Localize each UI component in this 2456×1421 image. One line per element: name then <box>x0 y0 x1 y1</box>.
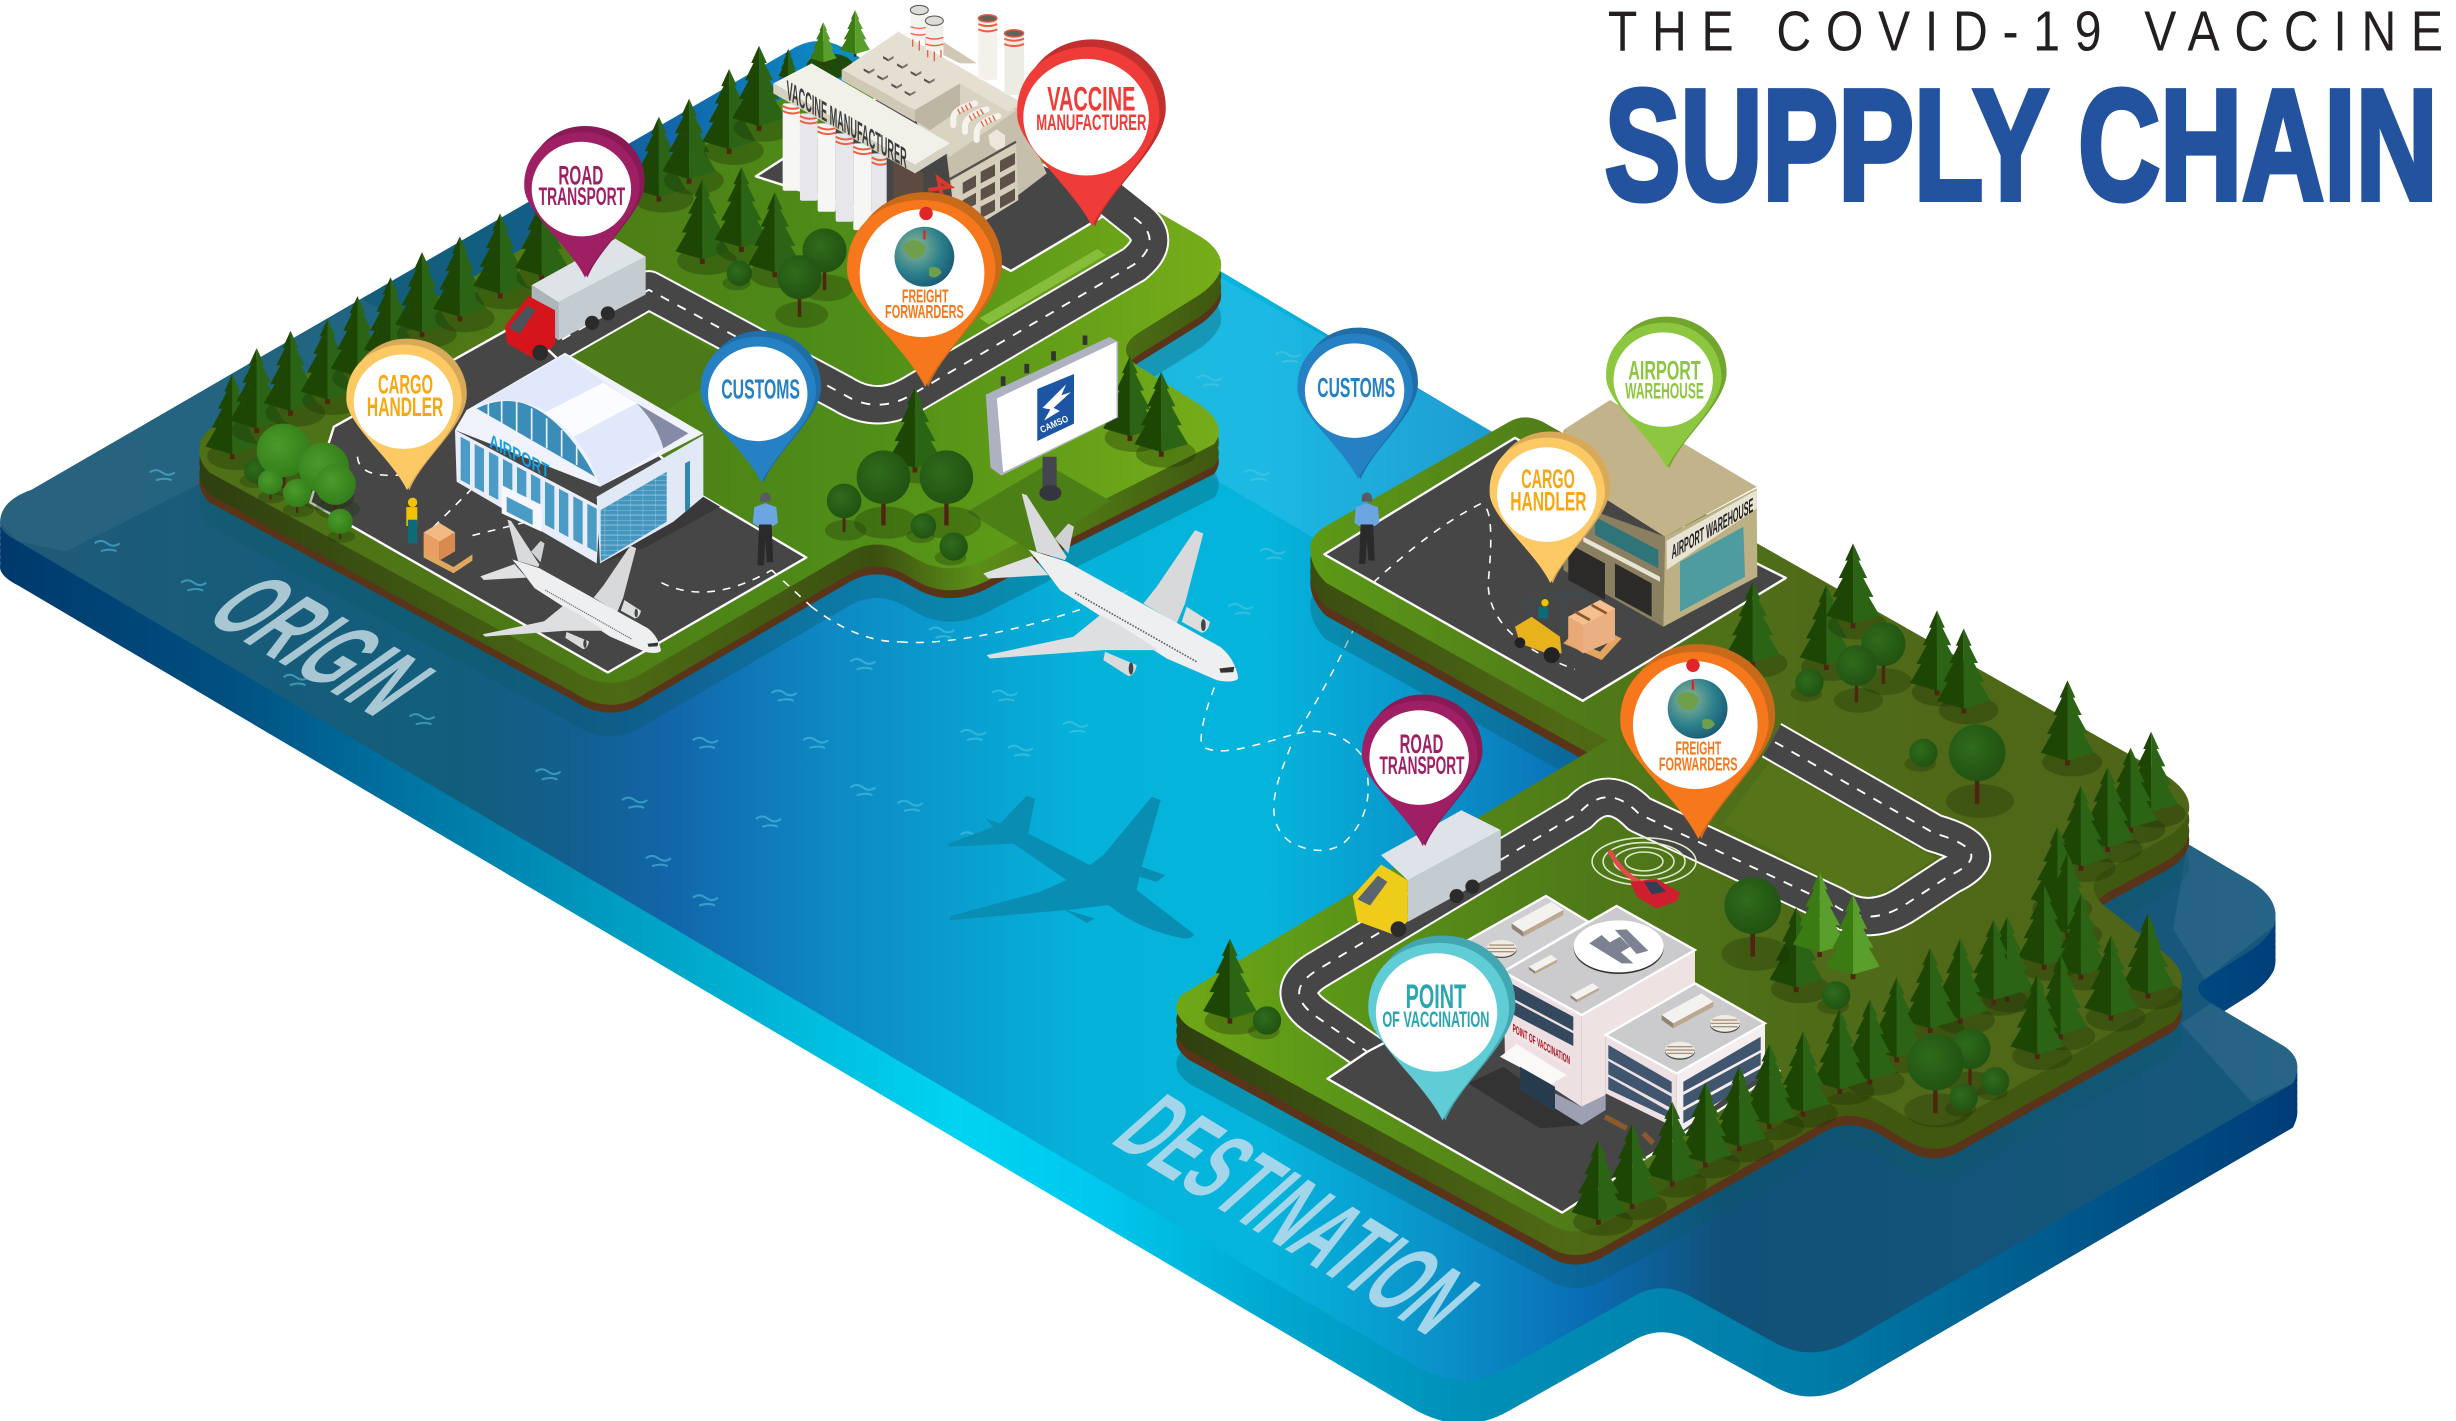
body <box>1630 879 1680 909</box>
right wing right wall <box>1677 1023 1765 1130</box>
window wing <box>952 143 1018 222</box>
pin body <box>1362 695 1483 846</box>
pin sublabel: TRANSPORT <box>539 183 626 211</box>
island top <box>199 76 1221 683</box>
forklift mast <box>1525 593 1588 633</box>
route: origin to sea <box>811 606 900 642</box>
grass parcel <box>567 310 740 413</box>
factory banner top <box>773 63 950 165</box>
garage door one <box>1568 543 1605 600</box>
red cab <box>505 296 555 359</box>
island: destination <box>1176 417 2189 1288</box>
windows <box>1595 517 1658 568</box>
cargo box <box>532 239 646 340</box>
factory: vaccine manufacturer: VACCINE MANUFACTURER <box>787 75 907 175</box>
pin: freight forwarders destination <box>1620 644 1775 839</box>
glass facade <box>601 472 667 562</box>
garage door two <box>1615 563 1652 617</box>
left wing roof <box>1468 896 1588 972</box>
silos <box>783 103 887 230</box>
water ripples <box>94 352 1364 906</box>
right wing windows <box>1608 1037 1761 1123</box>
pin sublabel: HANDLER <box>367 392 443 422</box>
chimneys <box>978 15 1024 95</box>
airport apron <box>310 323 806 672</box>
pin label: CUSTOMS <box>1317 372 1395 403</box>
red valve <box>928 178 950 195</box>
pin: point of vaccination <box>1368 935 1515 1120</box>
silo stripes <box>783 106 887 165</box>
helipad <box>1574 920 1664 972</box>
airport terminal <box>455 353 720 563</box>
left wing vents <box>1487 902 1563 958</box>
pin body <box>1017 39 1166 226</box>
island side and shadow <box>1176 430 2189 1288</box>
worker body <box>406 498 417 543</box>
pin body <box>701 331 821 482</box>
pin body <box>1297 328 1418 479</box>
pin sublabel: FORWARDERS <box>1659 755 1738 775</box>
lighter band at right corners <box>2173 844 2297 1102</box>
brown glazing <box>893 160 923 200</box>
pin label: AIRPORT <box>1628 356 1701 386</box>
pin label: FREIGHT <box>902 286 948 306</box>
roof front edge <box>842 70 915 122</box>
pin: cargo handler origin <box>346 339 467 490</box>
far right wall <box>947 107 1047 222</box>
pin body <box>1606 317 1727 468</box>
pipes <box>953 103 998 140</box>
pin sublabel: FORWARDERS <box>885 302 964 322</box>
main right wall <box>1582 950 1695 1107</box>
board face <box>997 342 1117 472</box>
forklift wheels <box>1515 637 1560 663</box>
airplane shadow <box>947 796 1194 939</box>
pin label: ROAD <box>1400 729 1443 759</box>
pin label: POINT <box>1406 978 1466 1016</box>
barrel roof <box>470 355 663 487</box>
pin sublabel: MANUFACTURER <box>1036 110 1146 135</box>
glass front <box>1680 527 1745 612</box>
warehouse apron <box>1324 438 1786 701</box>
barrel roof highlight <box>543 383 637 437</box>
airport warehouse <box>1515 400 1757 663</box>
route: across the water <box>900 583 1373 850</box>
label: origin: ORIGIN <box>181 559 459 733</box>
pallet of boxes <box>424 523 472 573</box>
truck: red <box>505 239 646 361</box>
pin label: CARGO <box>378 370 433 400</box>
pin sublabel: HANDLER <box>1510 486 1587 516</box>
main roof vents <box>1529 955 1599 1002</box>
awning <box>1583 537 1660 582</box>
lights <box>1003 335 1085 386</box>
pin body <box>847 192 1002 387</box>
roof <box>1560 400 1757 537</box>
pin sublabel: OF VACCINATION <box>1382 1007 1489 1032</box>
wing roof edge <box>948 142 1016 180</box>
courtyard wall <box>913 83 960 130</box>
roof vents <box>864 53 935 96</box>
roof <box>455 353 703 487</box>
lighter band at left corner <box>0 299 457 551</box>
arch window mullions <box>488 401 577 465</box>
factory yard <box>756 95 1128 271</box>
storage towers <box>910 5 943 61</box>
right wall <box>1663 488 1757 627</box>
green strip by yard <box>980 249 1105 324</box>
text: AIRPORT WAREHOUSE <box>1672 493 1753 564</box>
pin body <box>1490 432 1610 583</box>
yellow cab <box>1353 865 1408 935</box>
main airplane <box>983 493 1238 681</box>
entrance glass <box>507 497 533 525</box>
plinth <box>1555 1093 1606 1125</box>
billboard <box>986 335 1118 501</box>
main roof <box>842 32 1023 112</box>
courtyard floor <box>913 83 1017 157</box>
cap and head <box>760 492 771 502</box>
sign panel <box>1512 1022 1572 1070</box>
logo text: CAMSO <box>1038 414 1070 436</box>
left wall <box>1563 500 1665 627</box>
pin label: FREIGHT <box>1676 738 1721 758</box>
factory banner front <box>773 83 950 173</box>
pin label: CUSTOMS <box>721 373 800 404</box>
factory: vaccine manufacturer <box>773 5 1047 230</box>
helicopter with rotor <box>1592 838 1696 909</box>
pin: customs destination <box>1297 328 1418 479</box>
globe icon <box>1668 660 1728 739</box>
cargo box <box>1381 810 1501 922</box>
grass parcel <box>1723 762 1935 902</box>
cab window <box>1357 876 1387 906</box>
worker with pallet jack <box>406 498 472 573</box>
round trees <box>240 228 981 565</box>
arched window <box>477 401 595 477</box>
forklift driver <box>1538 599 1549 618</box>
shirt <box>1354 503 1379 526</box>
main roof <box>1503 906 1695 1015</box>
main windows <box>1511 983 1573 1046</box>
pin: vaccine manufacturer <box>1017 39 1166 226</box>
small plane at airport <box>480 520 661 653</box>
wing windows <box>963 153 1015 218</box>
right wall slot <box>685 461 690 512</box>
canopy <box>1500 1044 1567 1084</box>
board frame <box>986 337 1118 476</box>
truck: yellow <box>1353 810 1501 937</box>
road with lane markings <box>1299 740 1971 1065</box>
pin sublabel: WAREHOUSE <box>1625 378 1704 403</box>
pin: freight forwarders origin <box>847 192 1002 387</box>
benches <box>1605 1117 1653 1143</box>
customs officer: origin <box>753 492 778 565</box>
tail <box>1609 850 1646 885</box>
main left wall <box>1503 972 1582 1107</box>
right wing vents <box>1662 993 1740 1060</box>
ground shadow <box>1468 1067 1583 1128</box>
wheels <box>1391 880 1479 937</box>
pin body <box>1368 935 1515 1120</box>
logo <box>1037 374 1074 441</box>
pin: road transport destination <box>1362 695 1483 846</box>
right wall <box>597 435 703 563</box>
trousers <box>757 524 773 565</box>
pipe stripes <box>958 104 997 124</box>
airport sign: AIRPORT <box>489 430 550 483</box>
cockpit <box>1644 882 1666 895</box>
pin: cargo handler destination <box>1490 432 1610 583</box>
shadow on apron <box>600 497 720 563</box>
window columns <box>461 437 597 552</box>
conifer forest <box>1203 543 2186 1105</box>
pin label: CARGO <box>1521 464 1575 494</box>
road with lane markings <box>365 192 1150 452</box>
billboard grass shade <box>967 465 1110 551</box>
right wing left wall <box>1606 1035 1677 1128</box>
cab windshield <box>509 306 535 334</box>
island: origin <box>199 10 1221 736</box>
helipad shadow <box>1574 922 1664 974</box>
forklift body <box>1515 617 1562 653</box>
island top <box>1176 417 2189 1232</box>
pallet <box>1563 635 1622 660</box>
globe icon <box>894 208 954 287</box>
entrance <box>502 485 542 532</box>
pin body <box>346 339 467 490</box>
apron taxi route <box>357 457 811 606</box>
entrance door <box>1520 1067 1555 1112</box>
apron route <box>1373 504 1575 669</box>
helipad H strokes <box>1589 929 1648 963</box>
wheels <box>532 306 615 361</box>
island side and shadow <box>199 87 1221 736</box>
shirt <box>753 503 778 526</box>
label: destination: DESTINATION <box>1091 1077 1501 1353</box>
left wall <box>455 430 600 563</box>
pin label: VACCINE <box>1047 80 1135 118</box>
trousers <box>1359 524 1375 564</box>
cap and head <box>1362 492 1372 502</box>
rotor rings <box>1592 838 1696 885</box>
title: the covid-19 vaccine: THE COVID-19 VACCINE <box>1608 0 2443 63</box>
pin: airport warehouse <box>1606 317 1727 468</box>
pin label: ROAD <box>558 160 603 190</box>
grey roof well <box>637 403 688 448</box>
forest along back edge <box>206 10 1196 483</box>
pin: customs origin <box>701 331 821 482</box>
hospital: POINT OF VACCINATION <box>1513 1021 1570 1067</box>
sign band <box>1667 490 1757 570</box>
pin: road transport origin <box>524 126 645 278</box>
right wing roof <box>1606 983 1765 1073</box>
roof shadow <box>943 42 977 63</box>
roof box <box>988 129 1005 150</box>
logo runner <box>1042 384 1071 421</box>
pin sublabel: TRANSPORT <box>1379 752 1465 780</box>
round trees <box>1248 622 2014 1127</box>
pin body <box>524 126 645 278</box>
boxes <box>1568 600 1615 653</box>
pin body <box>1620 644 1775 839</box>
pole <box>1039 457 1061 501</box>
customs officer: destination <box>1354 492 1379 564</box>
hospital apron <box>1328 976 1779 1213</box>
conifers in front of hospital <box>1572 1032 1838 1236</box>
hospital <box>1468 896 1765 1143</box>
lighter water band top right <box>858 158 1496 543</box>
